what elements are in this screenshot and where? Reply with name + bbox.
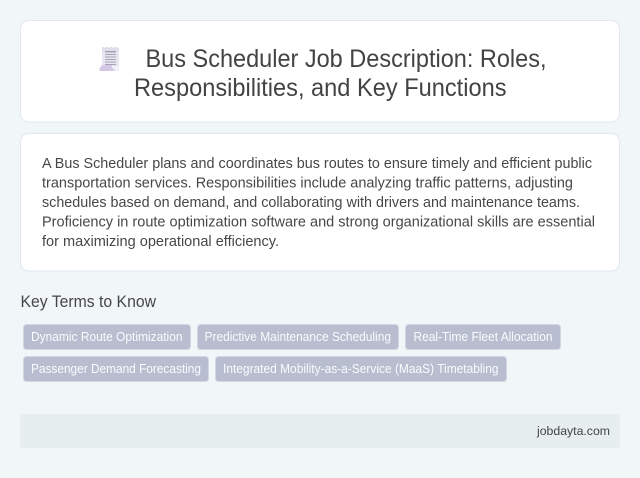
tag: predictive maintenance scheduling [198, 324, 398, 350]
description text: schedules based on demand, and collaborating with drivers and maintenance teams. [42, 195, 580, 211]
description text: transportation services. Responsibilities include analyzing traffic patterns, adjusting [42, 176, 573, 192]
heading: key terms: Key Terms to Know [20, 293, 156, 311]
panel: title card [20, 20, 620, 122]
tag: passenger demand forecasting [24, 356, 208, 382]
footer bar [20, 414, 620, 448]
footer bar: jobdayta.com [536, 424, 610, 438]
tag: real-time fleet allocation: Real-Time Fleet Allocation [414, 330, 552, 344]
tag: dynamic route optimization: Dynamic Route Optimization [31, 330, 182, 344]
tag: passenger demand forecasting: Passenger Demand Forecasting [31, 362, 201, 376]
description text: A Bus Scheduler plans and coordinates bus routes to ensure timely and efficient public [42, 156, 593, 172]
description text: Proficiency in route optimization software and strong organizational skills are essential [42, 214, 595, 230]
title text: Responsibilities, and Key Functions [134, 75, 506, 102]
tag list [24, 324, 560, 382]
tag: dynamic route optimization [24, 324, 190, 350]
tag: predictive maintenance scheduling: Predictive Maintenance Scheduling [204, 330, 391, 344]
title text [134, 46, 546, 102]
tag: integrated mobility-as-a-service timetabling [216, 356, 506, 382]
tag: real-time fleet allocation [406, 324, 560, 350]
title text: Bus Scheduler Job Description: Roles, [146, 46, 546, 73]
icon: schedule document [100, 47, 119, 71]
description text: for maximizing operational efficiency. [42, 234, 279, 250]
description text [42, 156, 595, 250]
panel: description card [20, 134, 620, 271]
tag: integrated mobility-as-a-service timetabling: Integrated Mobility-as-a-Service (MaaS) Timetabling [223, 362, 498, 376]
